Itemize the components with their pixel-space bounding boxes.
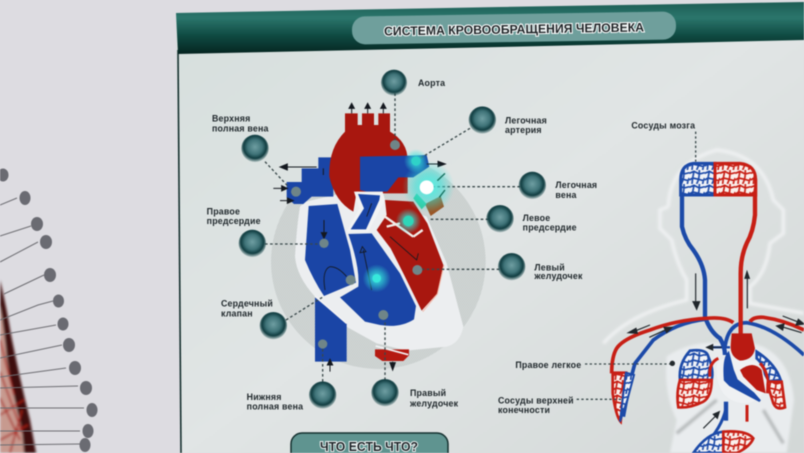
pins	[0, 168, 98, 452]
label: upper limb vessels: Сосуды верхней	[498, 395, 574, 405]
label: left ventricle: Левый	[534, 262, 565, 272]
brain vessels	[681, 163, 715, 195]
board left edge	[178, 50, 181, 453]
left lung	[757, 352, 781, 382]
title: СИСТЕМА КРОВООБРАЩЕНИЯ ЧЕЛОВЕКА	[384, 20, 644, 39]
right ventricle	[340, 233, 416, 326]
liver vessels	[693, 432, 723, 453]
vessels: veins	[682, 178, 725, 355]
descending aorta	[375, 349, 409, 361]
heart labels	[207, 78, 597, 411]
inferior vena cava	[315, 297, 347, 362]
pulmonary outflow	[351, 194, 380, 229]
left heart	[377, 200, 443, 311]
label: inferior vena cava: Нижняя	[247, 392, 282, 402]
label: pulmonary artery: Легочная	[505, 115, 547, 125]
left arm mesh	[613, 373, 626, 422]
label: right atrium: Правое	[207, 206, 240, 216]
header bar	[176, 2, 804, 54]
pin lines	[0, 198, 84, 445]
label: inferior vena cava: полная вена	[247, 401, 303, 411]
small anchor dots	[291, 140, 422, 349]
red arcs around mini heart	[710, 358, 768, 393]
label: superior vena cava: Верхняя	[212, 114, 251, 124]
title pill	[352, 11, 676, 45]
flow arrows	[273, 103, 445, 372]
label: right lung: Правое легкое	[515, 360, 581, 370]
label: aorta: Аорта	[418, 78, 445, 88]
label: pulmonary vein: Легочная	[555, 180, 597, 190]
heart diagram	[207, 70, 597, 411]
heart shape	[287, 113, 463, 362]
teal arrows near pulmonary vein	[437, 173, 445, 197]
label: left ventricle: желудочек	[533, 271, 583, 281]
label: right ventricle: желудочек	[409, 399, 459, 409]
lung marker	[670, 361, 675, 366]
hatched circle behind heart	[271, 154, 486, 369]
anatomy body fragment	[0, 280, 36, 453]
circulation body diagram	[498, 120, 804, 453]
what is what button	[291, 433, 448, 453]
label: heart valve: Сердечный	[221, 298, 273, 308]
right lung	[680, 350, 712, 380]
label: right atrium: предсердие	[207, 216, 261, 226]
vessels: arteries	[741, 178, 755, 340]
heart outer body	[295, 190, 463, 351]
label: brain vessels: Сосуды мозга	[631, 120, 695, 130]
label: upper limb vessels: конечности	[498, 405, 550, 415]
label: left atrium: Левое	[523, 213, 550, 223]
white body silhouette	[603, 150, 804, 343]
label: superior vena cava: полная вена	[212, 123, 269, 133]
aorta	[329, 113, 408, 212]
label: left atrium: предсердие	[523, 222, 577, 232]
anatomy figure with pins on the left	[0, 168, 98, 453]
vena cava and aorta below heart	[719, 402, 732, 421]
superior vena cava	[287, 157, 333, 204]
pulmonary vein stub	[425, 196, 444, 216]
label nodes	[239, 70, 546, 409]
heart edge line	[423, 265, 444, 312]
leaders for circulation	[577, 132, 696, 399]
glowing indicators	[363, 149, 454, 292]
white gap around chambers	[347, 192, 385, 232]
label: heart valve: клапан	[221, 308, 253, 318]
leader lines	[265, 93, 520, 382]
board panel	[176, 2, 804, 453]
diaphragm shadow	[677, 400, 783, 443]
label: pulmonary artery: артерия	[505, 125, 542, 135]
pulmonary artery	[360, 155, 429, 192]
label: right ventricle: Правый	[410, 388, 446, 398]
torso and lungs backing	[666, 343, 794, 453]
right atrium	[305, 204, 356, 296]
circulation arrows	[628, 272, 804, 428]
mini heart	[717, 358, 767, 403]
white valve strokes	[383, 215, 423, 237]
label: pulmonary vein: вена	[555, 190, 577, 200]
